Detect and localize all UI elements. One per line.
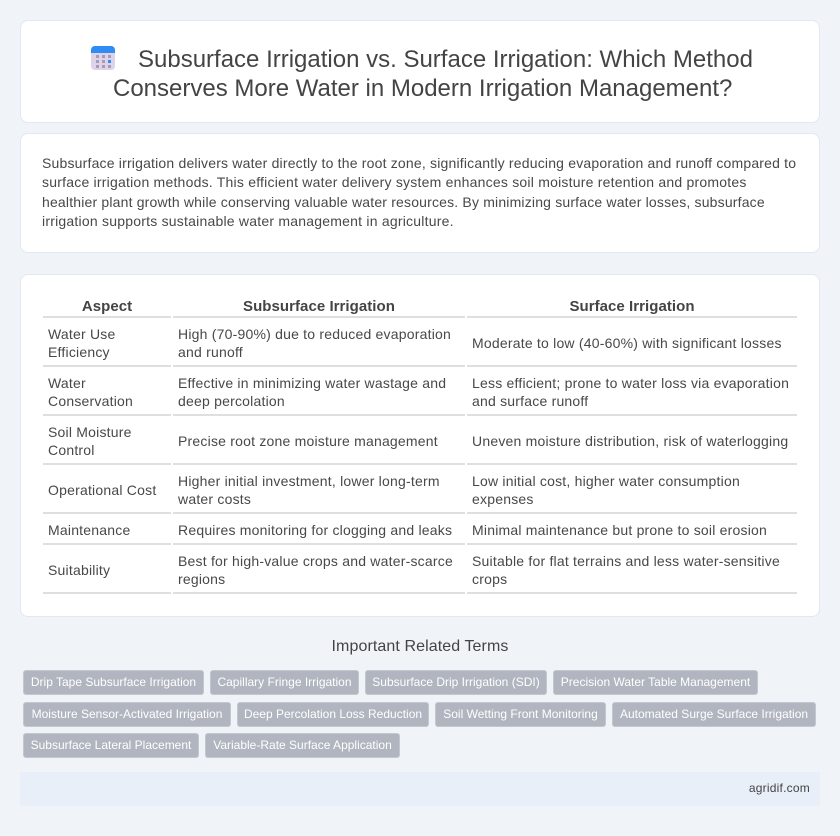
comparison table: regions (178, 570, 225, 586)
comparison table: Water Use (48, 326, 116, 342)
comparison table (43, 298, 797, 594)
comparison table: Less efficient; prone to water loss via evaporation (472, 374, 789, 390)
related term tags: Soil Wetting Front Monitoring (443, 707, 598, 721)
comparison table: Precise root zone moisture management (178, 432, 438, 448)
comparison table: Moderate to low (40-60%) with significant losses (472, 334, 782, 350)
comparison table: Control (48, 442, 95, 458)
header card (20, 20, 820, 123)
comparison table: Best for high-value crops and water-scarce (178, 552, 453, 568)
comparison table: Subsurface Irrigation (243, 298, 395, 315)
comparison table: Effective in minimizing water wastage and (178, 374, 446, 390)
comparison table: Minimal maintenance but prone to soil erosion (472, 522, 767, 538)
title (113, 46, 753, 102)
title: Subsurface Irrigation vs. Surface Irrigation: Which Method (138, 46, 753, 73)
icon: calendar (91, 46, 115, 70)
related term tags: Drip Tape Subsurface Irrigation (31, 675, 196, 689)
intro text (42, 155, 796, 229)
related term tags: Subsurface Lateral Placement (31, 738, 191, 752)
comparison table: High (70-90%) due to reduced evaporation (178, 326, 451, 342)
comparison table: deep percolation (178, 392, 285, 408)
comparison table: Higher initial investment, lower long-term (178, 472, 440, 488)
panel: introduction (20, 133, 820, 253)
related term tags: Precision Water Table Management (561, 675, 750, 689)
footer text: site name: agridif.com (749, 781, 810, 795)
comparison table: Suitability (48, 562, 110, 578)
heading: related terms: Important Related Terms (332, 638, 508, 655)
intro text: healthier plant growth while conserving valuable water resources. By minimizing surface water losses, subsurface (42, 194, 765, 210)
comparison table: Water (48, 374, 86, 390)
related term tags: Capillary Fringe Irrigation (217, 675, 352, 689)
comparison table: Operational Cost (48, 482, 156, 498)
comparison table: Requires monitoring for clogging and leaks (178, 522, 452, 538)
related term tags: Variable-Rate Surface Application (213, 738, 392, 752)
related term tags: Subsurface Drip Irrigation (SDI) (372, 675, 540, 689)
comparison table: Low initial cost, higher water consumption (472, 472, 740, 488)
comparison table: water costs (178, 490, 251, 506)
comparison table: crops (472, 570, 507, 586)
intro text: Subsurface irrigation delivers water directly to the root zone, significantly reducing evaporation and runoff compared to (42, 155, 796, 171)
comparison table: Aspect (82, 298, 132, 315)
intro text: irrigation supports sustainable water management in agriculture. (42, 213, 454, 229)
related term tags (23, 670, 816, 758)
comparison table: Maintenance (48, 522, 130, 538)
comparison table: expenses (472, 490, 534, 506)
panel: comparison table card (20, 274, 820, 617)
comparison table: and surface runoff (472, 392, 588, 408)
comparison table: and runoff (178, 344, 243, 360)
intro text: surface irrigation methods. This efficient water delivery system enhances soil moisture retention and promotes (42, 174, 747, 190)
title: Conserves More Water in Modern Irrigation Management? (113, 75, 732, 102)
related term tags: Automated Surge Surface Irrigation (620, 707, 808, 721)
comparison table: Efficiency (48, 344, 110, 360)
related term tags: Moisture Sensor-Activated Irrigation (32, 707, 222, 721)
related term tags: Deep Percolation Loss Reduction (244, 707, 422, 721)
footer (20, 772, 820, 806)
comparison table: Surface Irrigation (569, 298, 695, 315)
comparison table: Uneven moisture distribution, risk of waterlogging (472, 432, 788, 448)
comparison table: Suitable for flat terrains and less water-sensitive (472, 552, 780, 568)
comparison table: Soil Moisture (48, 424, 132, 440)
comparison table: Conservation (48, 392, 133, 408)
